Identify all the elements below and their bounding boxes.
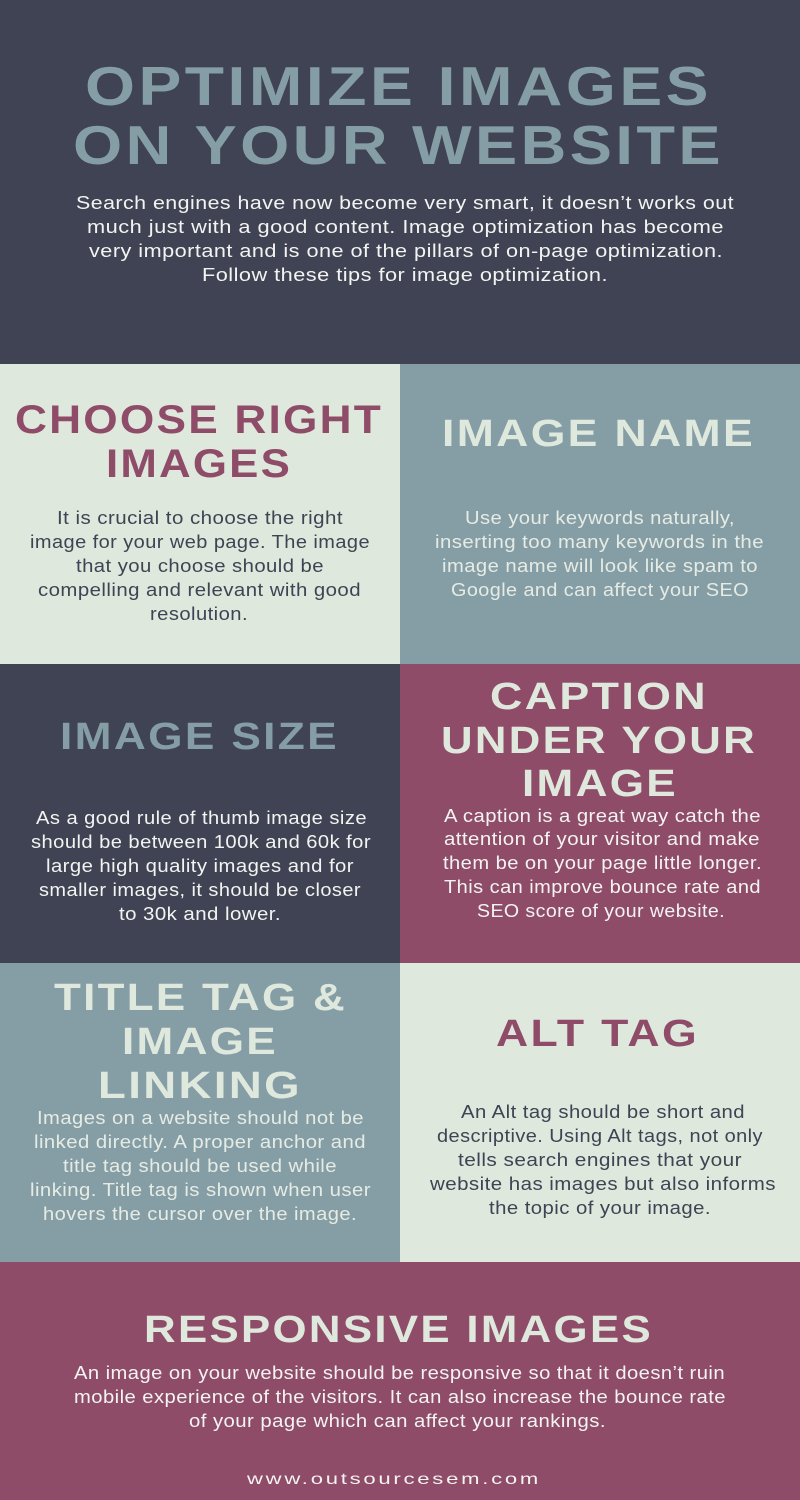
- text: image size: smaller images, it should be closer: [39, 880, 361, 900]
- panel: header: [0, 0, 800, 364]
- text: alt tag: the topic of your image.: [489, 1198, 711, 1218]
- heading: title tag and image linking: IMAGE: [122, 1021, 278, 1063]
- intro text: Follow these tips for image optimization.: [202, 265, 608, 285]
- heading: title tag and image linking: LINKING: [98, 1065, 302, 1107]
- text: image name: Use your keywords naturally,: [465, 508, 735, 528]
- heading: choose right images: [15, 398, 383, 486]
- panel: alt tag: [400, 963, 800, 1262]
- text: choose right images: compelling and relevant with good: [38, 580, 361, 600]
- text: image size: As a good rule of thumb image size: [36, 808, 367, 828]
- text: alt tag: tells search engines that your: [458, 1150, 742, 1170]
- text: responsive images: [74, 1363, 726, 1431]
- text: title tag: Images on a website should not be: [37, 1108, 364, 1128]
- text: responsive images: An image on your website should be responsive so that it doesn’t ruin: [74, 1363, 725, 1383]
- heading: choose right images: CHOOSE RIGHT: [15, 398, 383, 442]
- panel: responsive images: [0, 1262, 800, 1500]
- text: caption: A caption is a great way catch the: [444, 806, 761, 826]
- text: responsive images: of your page which can affect your rankings.: [189, 1411, 606, 1431]
- heading: caption under your image: CAPTION: [490, 676, 708, 718]
- heading: title tag and image linking: [54, 977, 347, 1107]
- text: image size: to 30k and lower.: [119, 904, 281, 924]
- text: alt tag: An Alt tag should be short and: [461, 1102, 745, 1122]
- text: caption: [443, 806, 762, 921]
- panel: image name: [400, 364, 800, 664]
- intro text: much just with a good content. Image optimization has become: [87, 217, 724, 237]
- text: caption: SEO score of your website.: [477, 901, 725, 921]
- panel: caption under your image: [400, 664, 800, 963]
- text: title tag: title tag should be used while: [63, 1156, 337, 1176]
- text: title tag: linking. Title tag is shown when user: [30, 1180, 371, 1200]
- text: image name: inserting too many keywords in the: [435, 532, 764, 552]
- text: image size: [31, 808, 371, 924]
- heading: caption under your image: IMAGE: [522, 763, 678, 805]
- text: image name: [435, 508, 764, 600]
- intro text: [76, 193, 734, 285]
- text: title tag: hovers the cursor over the image.: [43, 1204, 357, 1224]
- text: alt tag: website has images but also informs: [429, 1174, 776, 1194]
- title: ON YOUR WEBSITE: [73, 114, 724, 176]
- title: [73, 55, 724, 176]
- text: caption: This can improve bounce rate and: [444, 877, 761, 897]
- heading: choose right images: IMAGES: [106, 442, 292, 486]
- intro text: very important and is one of the pillars of on-page optimization.: [89, 241, 723, 261]
- text: alt tag: [429, 1102, 776, 1218]
- heading: image name: IMAGE NAME: [442, 413, 755, 455]
- title: OPTIMIZE IMAGES: [85, 55, 712, 117]
- text: image size: should be between 100k and 60k for: [31, 832, 371, 852]
- text: alt tag: descriptive. Using Alt tags, not only: [437, 1126, 763, 1146]
- panel: image size: [0, 664, 400, 963]
- text: title tag: [30, 1108, 371, 1224]
- text: choose right images: image for your web page. The image: [30, 532, 370, 552]
- text: choose right images: It is crucial to choose the right: [57, 508, 343, 528]
- text: caption: attention of your visitor and make: [444, 829, 760, 849]
- heading: caption under your image: [441, 676, 757, 805]
- footer url: www.outsourcesem.com: [246, 1471, 541, 1488]
- heading: caption under your image: UNDER YOUR: [441, 720, 757, 762]
- text: responsive images: mobile experience of the visitors. It can also increase the bounce rate: [74, 1387, 726, 1407]
- heading: title tag and image linking: TITLE TAG &: [54, 977, 347, 1019]
- text: image size: large high quality images and for: [46, 856, 354, 876]
- heading: image size: IMAGE SIZE: [60, 716, 339, 758]
- intro text: Search engines have now become very smart, it doesn’t works out: [76, 193, 734, 213]
- text: caption: them be on your page little longer.: [443, 853, 762, 873]
- text: choose right images: that you choose should be: [76, 556, 324, 576]
- heading: alt tag: ALT TAG: [496, 1013, 699, 1055]
- text: image name: image name will look like spam to: [442, 556, 758, 576]
- text: title tag: linked directly. A proper anchor and: [34, 1132, 366, 1152]
- panel: title tag and image linking: [0, 963, 400, 1262]
- text: image name: Google and can affect your SEO: [451, 580, 749, 600]
- panel: choose right images: [0, 364, 400, 664]
- text: choose right images: resolution.: [150, 604, 248, 624]
- text: choose right images: [30, 508, 370, 624]
- heading: responsive images: RESPONSIVE IMAGES: [144, 1309, 653, 1351]
